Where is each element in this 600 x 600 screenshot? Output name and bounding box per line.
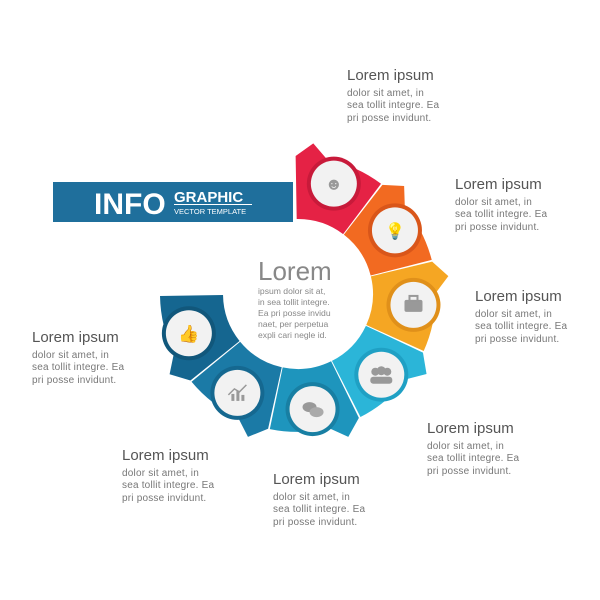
text block 4 (427, 420, 520, 477)
center text: ipsum dolor sit at, (258, 286, 325, 296)
segment: dark blue: 👍 (178, 323, 199, 343)
text block 1: pri posse invidunt. (347, 113, 431, 124)
segment: orange: 💡 (385, 221, 405, 240)
center text: Lorem (258, 256, 332, 286)
text block 3: pri posse invidunt. (475, 334, 559, 345)
segment: cyan (318, 311, 440, 434)
text block 6: pri posse invidunt. (122, 493, 206, 504)
center text (258, 256, 332, 340)
text block 5: pri posse invidunt. (273, 517, 357, 528)
center text: naet, per perpetua (258, 319, 328, 329)
text block 7: sea tollit integre. Ea (32, 362, 124, 373)
text block 4: pri posse invidunt. (427, 466, 511, 477)
text block 3: Lorem ipsum (475, 288, 562, 305)
banner: INFO (94, 188, 166, 221)
text block 3: sea tollit integre. Ea (475, 321, 567, 332)
text block 5: sea tollit integre. Ea (273, 504, 365, 515)
text block 2: dolor sit amet, in (455, 197, 532, 208)
text block 5: Lorem ipsum (273, 471, 360, 488)
segment: dark blue (141, 276, 247, 387)
segment: orange (333, 172, 451, 293)
text block 6 (122, 447, 214, 504)
banner: GRAPHIC (174, 189, 243, 206)
segment: teal (262, 359, 361, 446)
center text: expli cari negle id. (258, 330, 327, 340)
text block 2: sea tollit integre. Ea (455, 209, 547, 220)
segment: yellow (364, 256, 450, 353)
center text: Ea pri posse invidu (258, 308, 331, 318)
segment: red: ☻ (325, 175, 343, 194)
text block 7: dolor sit amet, in (32, 350, 109, 361)
text block 5: dolor sit amet, in (273, 492, 350, 503)
banner (53, 182, 293, 222)
text block 6: dolor sit amet, in (122, 468, 199, 479)
text block 7: Lorem ipsum (32, 329, 119, 346)
text block 4: sea tollit integre. Ea (427, 453, 519, 464)
text block 4: dolor sit amet, in (427, 441, 504, 452)
text block 7: pri posse invidunt. (32, 375, 116, 386)
text block 3 (475, 288, 568, 345)
text block 2 (455, 176, 548, 233)
text block 1: Lorem ipsum (347, 67, 434, 84)
text block 1: dolor sit amet, in (347, 88, 424, 99)
text block 3: dolor sit amet, in (475, 309, 552, 320)
text block 2: Lorem ipsum (455, 176, 542, 193)
text block 5 (273, 471, 366, 528)
segment: red (277, 137, 387, 240)
text block 7 (32, 329, 124, 386)
text block 4: Lorem ipsum (427, 420, 514, 437)
text block 6: Lorem ipsum (122, 447, 209, 464)
text block 1: sea tollit integre. Ea (347, 100, 439, 111)
text block 6: sea tollit integre. Ea (122, 480, 214, 491)
text block 1 (347, 67, 440, 124)
segment: blue (180, 331, 299, 448)
center text: in sea tollit integre. (258, 297, 330, 307)
text block 2: pri posse invidunt. (455, 222, 539, 233)
banner: VECTOR TEMPLATE (174, 207, 246, 216)
